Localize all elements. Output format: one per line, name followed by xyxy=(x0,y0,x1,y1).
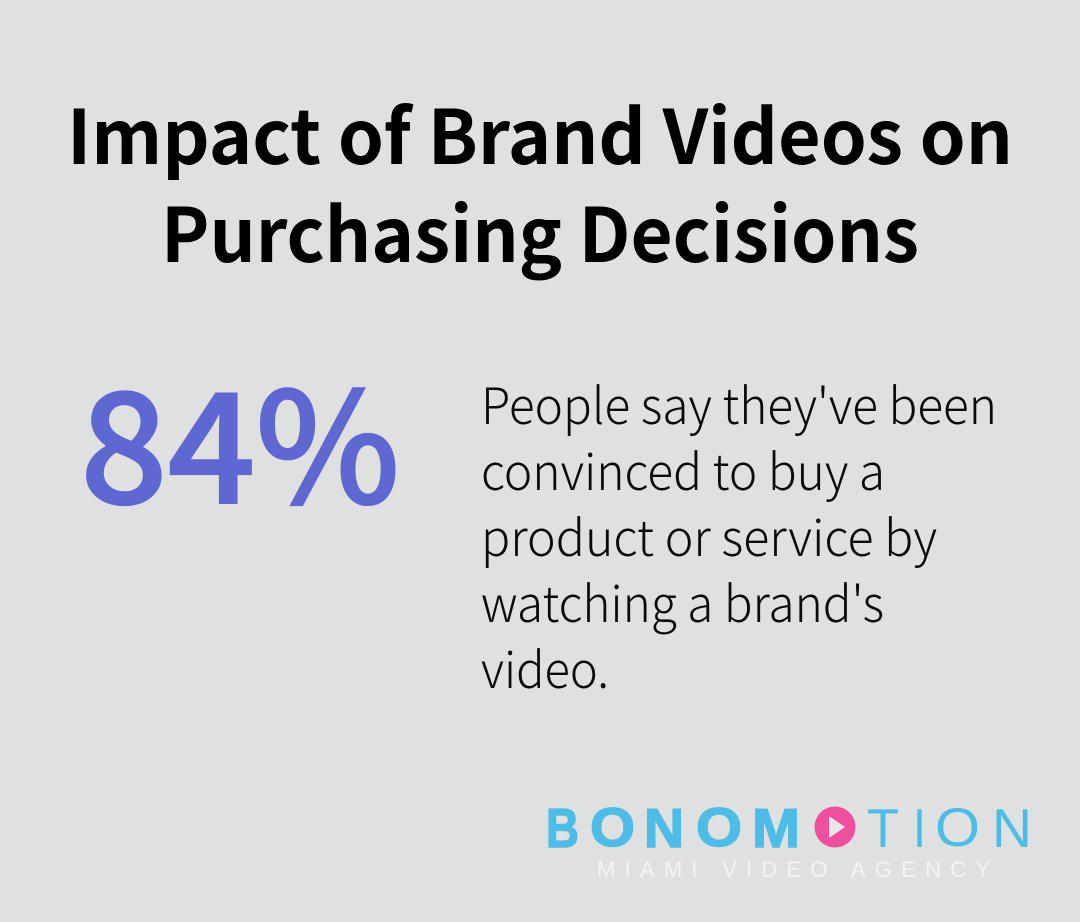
logo wordmark: TION: O xyxy=(935,796,980,858)
logo wordmark: BONOM xyxy=(546,796,800,859)
description text: product or service by xyxy=(481,499,937,571)
logo wordmark: BONOM: B xyxy=(546,797,579,859)
title xyxy=(67,77,1013,284)
icon: pink play button xyxy=(814,806,856,848)
statistic: 84%: 84% xyxy=(80,327,400,548)
logo wordmark: BONOM: N xyxy=(644,797,684,859)
description text: watching a brand's xyxy=(481,565,884,637)
description text xyxy=(481,367,997,703)
logo: Bonomotion xyxy=(546,796,1032,882)
title: Impact of Brand Videos on xyxy=(67,77,1013,186)
logo wordmark: BONOM: O xyxy=(590,796,635,858)
logo wordmark: TION: T xyxy=(867,797,899,859)
logo tagline: MIAMI VIDEO AGENCY xyxy=(597,857,990,882)
logo wordmark: TION xyxy=(867,796,1032,859)
logo wordmark: BONOM: M xyxy=(752,797,800,859)
description text: People say they've been xyxy=(481,367,997,439)
logo wordmark: TION: N xyxy=(992,797,1032,859)
description text: video. xyxy=(481,631,609,703)
logo wordmark: TION: I xyxy=(913,797,926,859)
description text: convinced to buy a xyxy=(481,433,885,505)
logo wordmark: BONOM: O xyxy=(696,796,742,858)
title: Purchasing Decisions xyxy=(161,175,919,284)
